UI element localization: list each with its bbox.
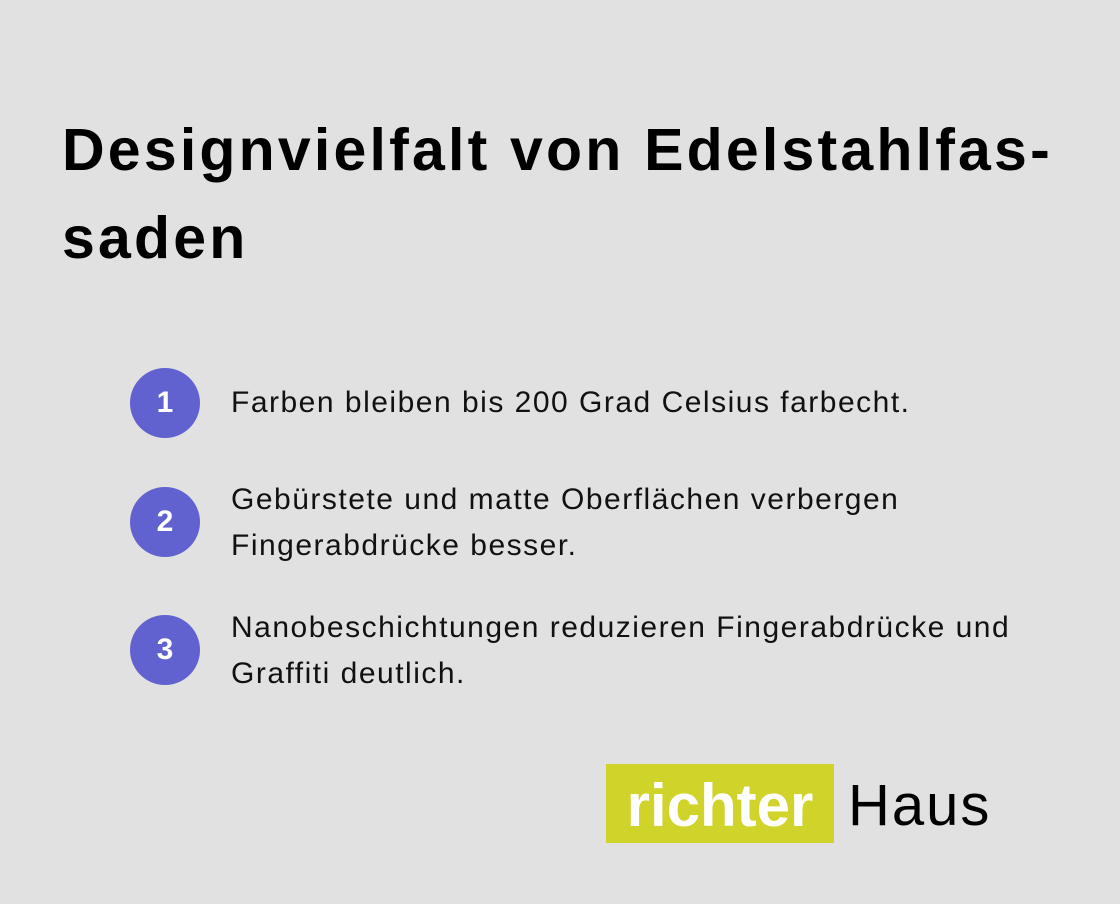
text 2 [231, 483, 899, 562]
number badge 3 [130, 615, 200, 685]
text 1: Farben bleiben bis 200 Grad Celsius farbecht. [231, 386, 911, 419]
text 3: Graffiti deutlich. [231, 657, 466, 690]
text 2: Fingerabdrücke besser. [231, 529, 578, 562]
text 2: Gebürstete und matte Oberflächen verbergen [231, 483, 899, 516]
logo text: Haus: Haus [848, 773, 991, 838]
number badge 3: 3 [157, 633, 173, 666]
number badge 1: 1 [157, 386, 173, 419]
logo box: richter: richter [627, 772, 813, 839]
logo box: richter [606, 764, 834, 843]
text 3 [231, 611, 1010, 690]
number badge 2: 2 [157, 505, 173, 538]
item 1 [130, 368, 911, 438]
title: Designvielfalt von Edelstahlfas- [62, 117, 1053, 183]
item 2 [130, 483, 899, 562]
item 3 [130, 611, 1010, 690]
number badge 2 [130, 487, 200, 557]
title: saden [62, 205, 249, 271]
text 3: Nanobeschichtungen reduzieren Fingerabdrücke und [231, 611, 1010, 644]
number badge 1 [130, 368, 200, 438]
title [62, 117, 1053, 271]
logo [606, 764, 991, 843]
